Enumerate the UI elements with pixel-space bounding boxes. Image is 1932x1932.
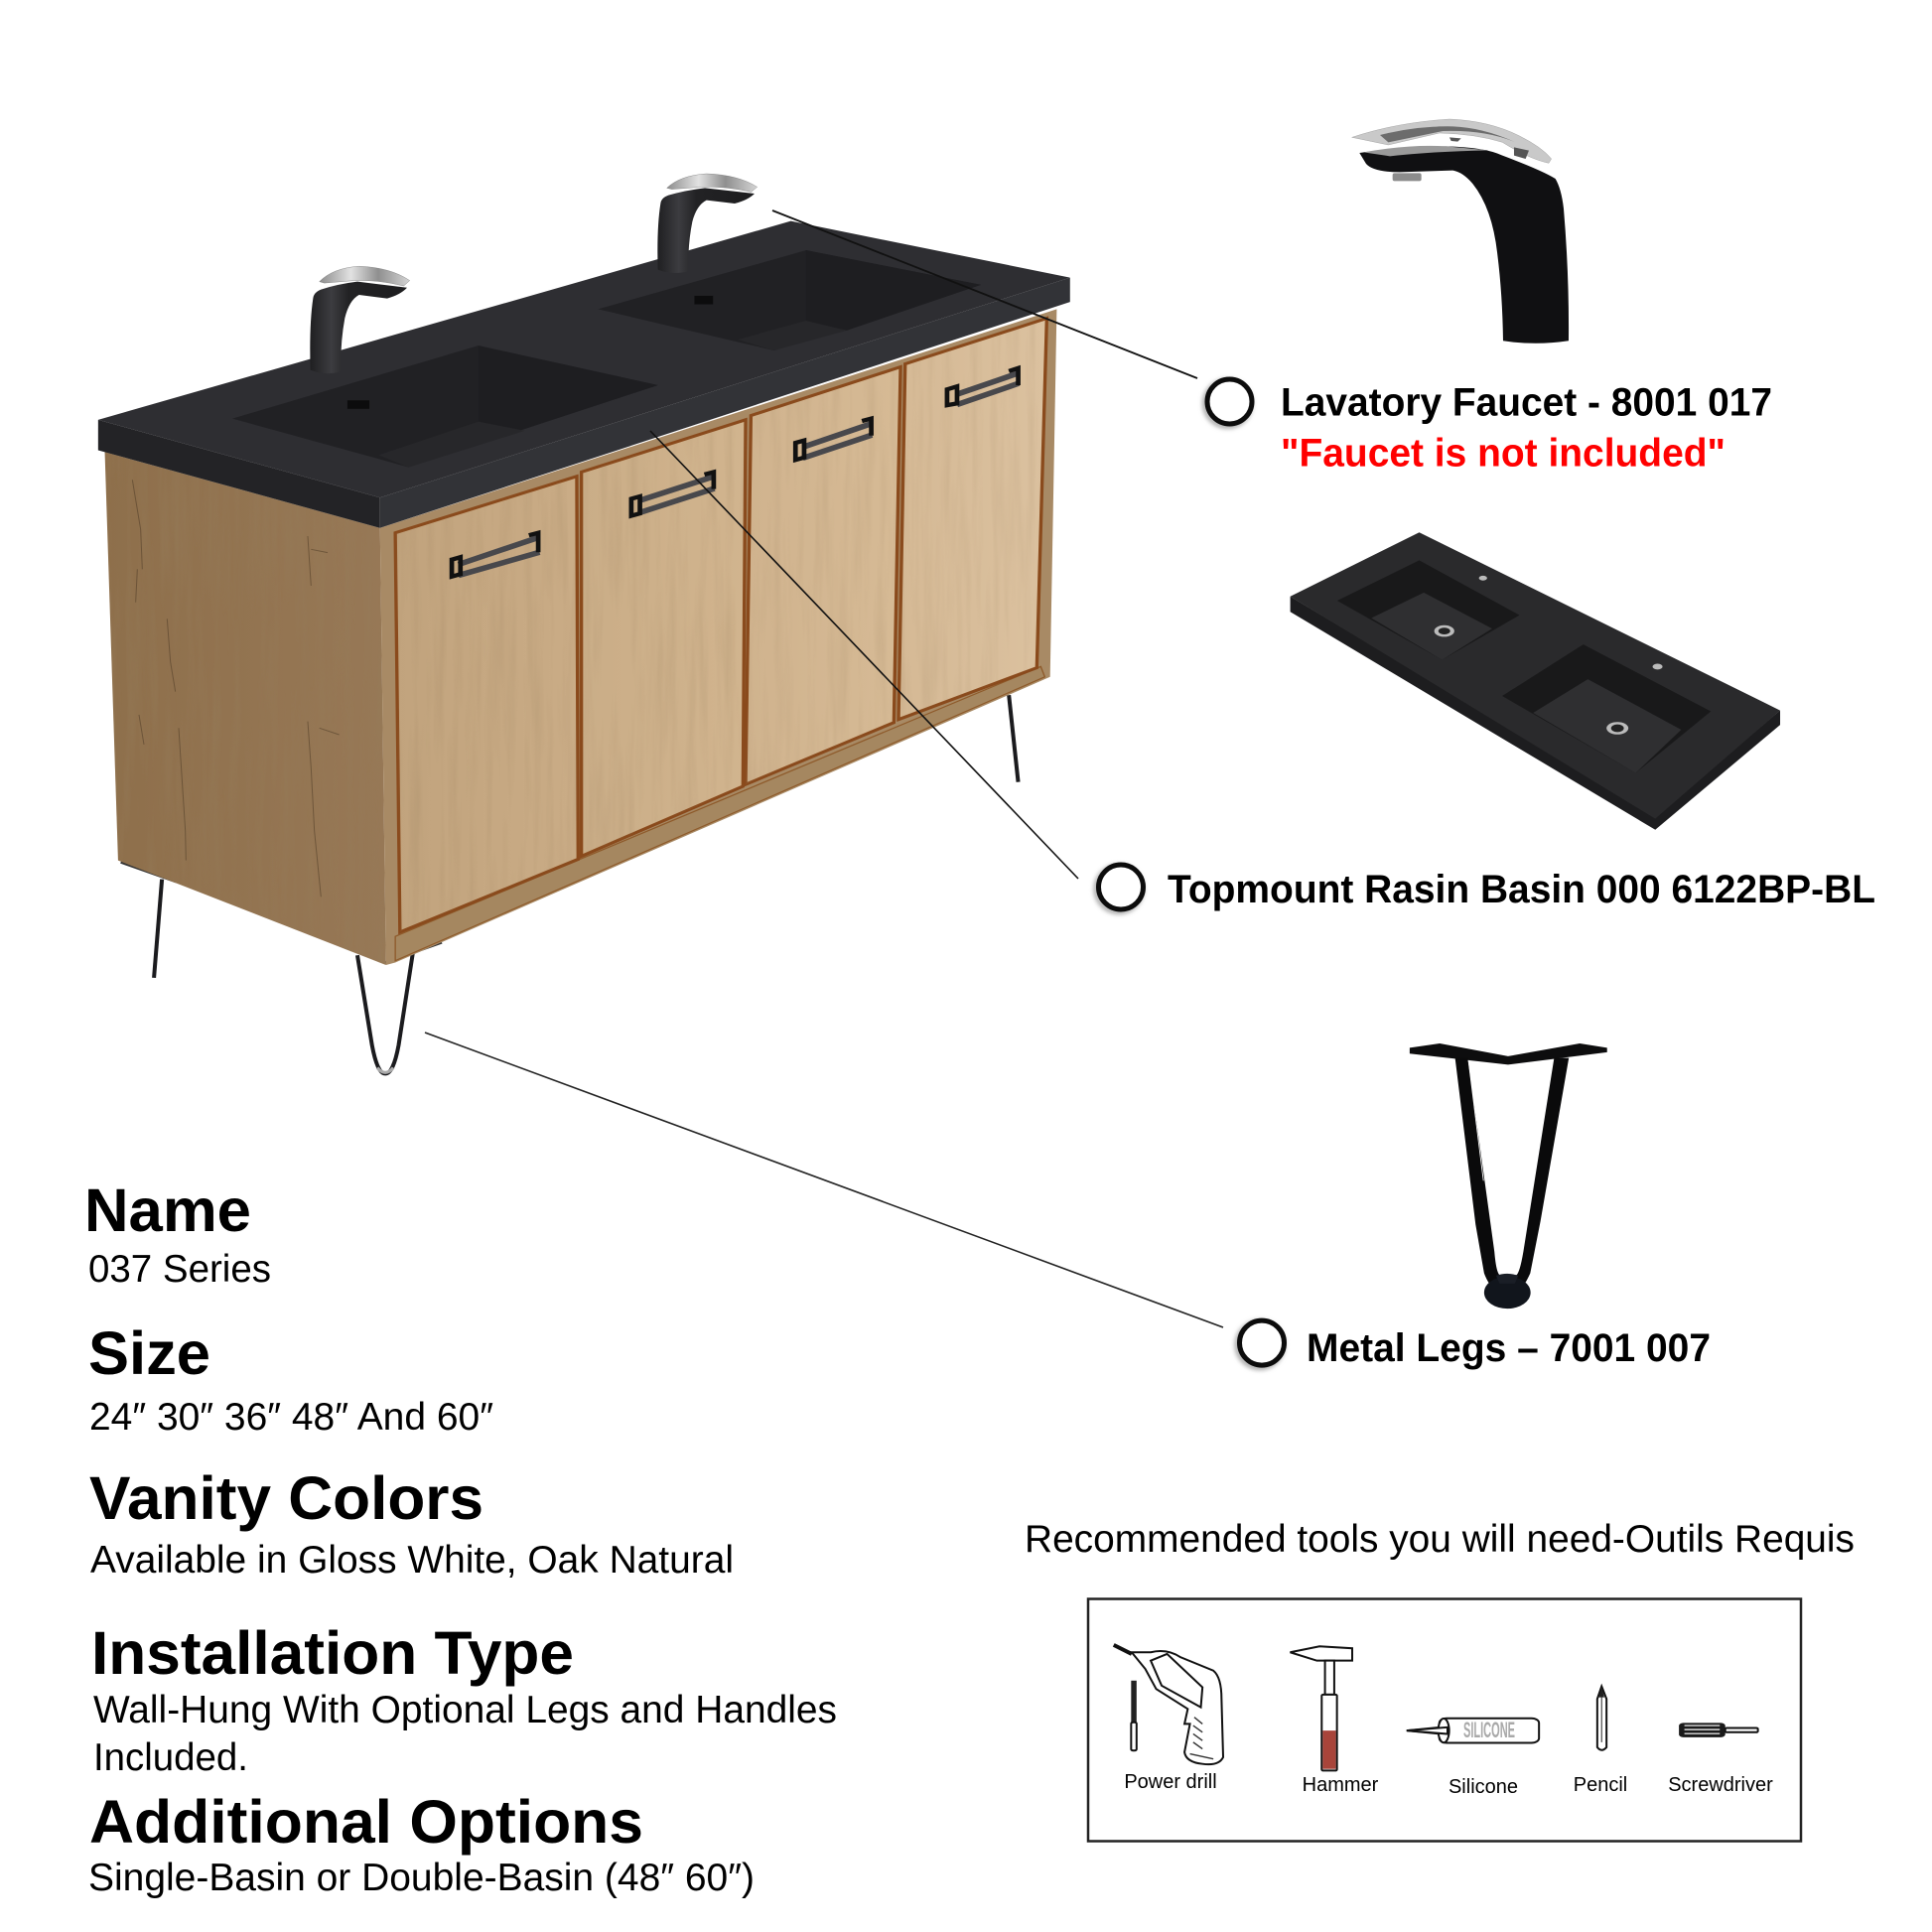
- value: installation type: Wall-Hung With Optional Legs and Handles: [93, 1689, 837, 1731]
- door handles: [452, 368, 1019, 577]
- hairpin rods: [1455, 1058, 1569, 1291]
- icon: silicone tube: [1407, 1719, 1539, 1743]
- callout marker: faucet: [1205, 379, 1252, 427]
- leader line: basin: [650, 431, 1078, 879]
- door 2: [582, 420, 746, 856]
- product: double-basin vanity: [98, 221, 1070, 1074]
- product photo: basin top: [1291, 532, 1780, 830]
- heading: size: Size: [88, 1319, 210, 1387]
- chrome lever: [1352, 119, 1552, 163]
- door 3: [746, 367, 900, 784]
- faucet on right basin: [657, 174, 758, 273]
- basin top surface: [1291, 532, 1780, 819]
- faucet aerator: [1393, 173, 1422, 181]
- left bowl: [1337, 560, 1519, 660]
- rod highlight: [1468, 1060, 1483, 1180]
- door 4: [898, 319, 1046, 720]
- icon: hammer: [1290, 1646, 1352, 1770]
- heading: additional options: Additional Options: [89, 1788, 643, 1856]
- panel: tools box: [1088, 1598, 1801, 1841]
- leader line: legs: [425, 1033, 1223, 1327]
- left sink basin: [232, 345, 658, 468]
- icon: pencil: [1597, 1686, 1606, 1750]
- chrome lever shading: [1380, 126, 1516, 142]
- leg mounting plate: [1410, 1043, 1607, 1064]
- tool label: hammer: Hammer: [1303, 1774, 1379, 1796]
- right sink basin: [598, 250, 981, 350]
- icon: power drill: [1114, 1645, 1223, 1764]
- label: lavatory faucet: Lavatory Faucet - 8001 017: [1281, 381, 1772, 425]
- faucet body: [1359, 146, 1569, 344]
- product photo: lavatory faucet: [1352, 119, 1569, 344]
- value: vanity colors: Available in Gloss White, Oak Natural: [90, 1539, 734, 1582]
- right bowl: [1502, 644, 1711, 773]
- label: metal legs: Metal Legs – 7001 007: [1307, 1326, 1711, 1370]
- icon: screwdriver: [1679, 1723, 1758, 1737]
- frame bottom edge: [395, 666, 1044, 961]
- countertop left edge: [98, 420, 380, 528]
- faucet top highlight: [1363, 146, 1489, 156]
- product photo: metal hairpin leg: [1410, 1043, 1607, 1309]
- silicone tube lettering: SILICONE: [1463, 1718, 1515, 1742]
- heading: name: Name: [84, 1176, 251, 1244]
- cabinet front frame: [380, 309, 1056, 965]
- tool label: pencil: Pencil: [1574, 1774, 1627, 1796]
- faucet on left basin: [310, 266, 410, 373]
- specifications text block: [84, 1176, 837, 1899]
- tool label: silicone: Silicone: [1449, 1776, 1518, 1798]
- rubber foot: [1484, 1277, 1531, 1309]
- tool label: screwdriver: Screwdriver: [1668, 1774, 1773, 1796]
- cabinet side panel: [105, 452, 386, 965]
- countertop front edge: [380, 278, 1070, 528]
- tool label: power drill: Power drill: [1124, 1771, 1217, 1793]
- tools illustrations: [1114, 1645, 1758, 1770]
- leader line: faucet: [772, 210, 1197, 378]
- value: installation type line 2: Included.: [93, 1736, 248, 1779]
- warning: faucet not included: "Faucet is not included": [1281, 431, 1725, 475]
- door 1: [395, 477, 578, 932]
- basin side edges: [1291, 597, 1780, 830]
- label: topmount basin: Topmount Rasin Basin 000 6122BP-BL: [1168, 868, 1875, 911]
- value: size: 24″ 30″ 36″ 48″ And 60″: [89, 1396, 493, 1439]
- heading: vanity colors: Vanity Colors: [89, 1464, 483, 1532]
- lever pivots: [1449, 137, 1529, 159]
- countertop top surface: [98, 221, 1070, 497]
- wood cracks on side panel: [132, 480, 340, 897]
- callout marker: basin: [1096, 865, 1144, 911]
- vanity legs: [121, 695, 1019, 1074]
- callout marker: legs: [1237, 1320, 1285, 1368]
- value: name: 037 Series: [88, 1248, 271, 1291]
- heading: installation type: Installation Type: [91, 1619, 574, 1687]
- foot top: [1496, 1274, 1518, 1284]
- heading: recommended tools: Recommended tools you will need-Outils Requis: [1025, 1518, 1855, 1561]
- value: additional options: Single-Basin or Double-Basin (48″ 60″): [88, 1857, 755, 1899]
- black countertop: [98, 221, 1070, 528]
